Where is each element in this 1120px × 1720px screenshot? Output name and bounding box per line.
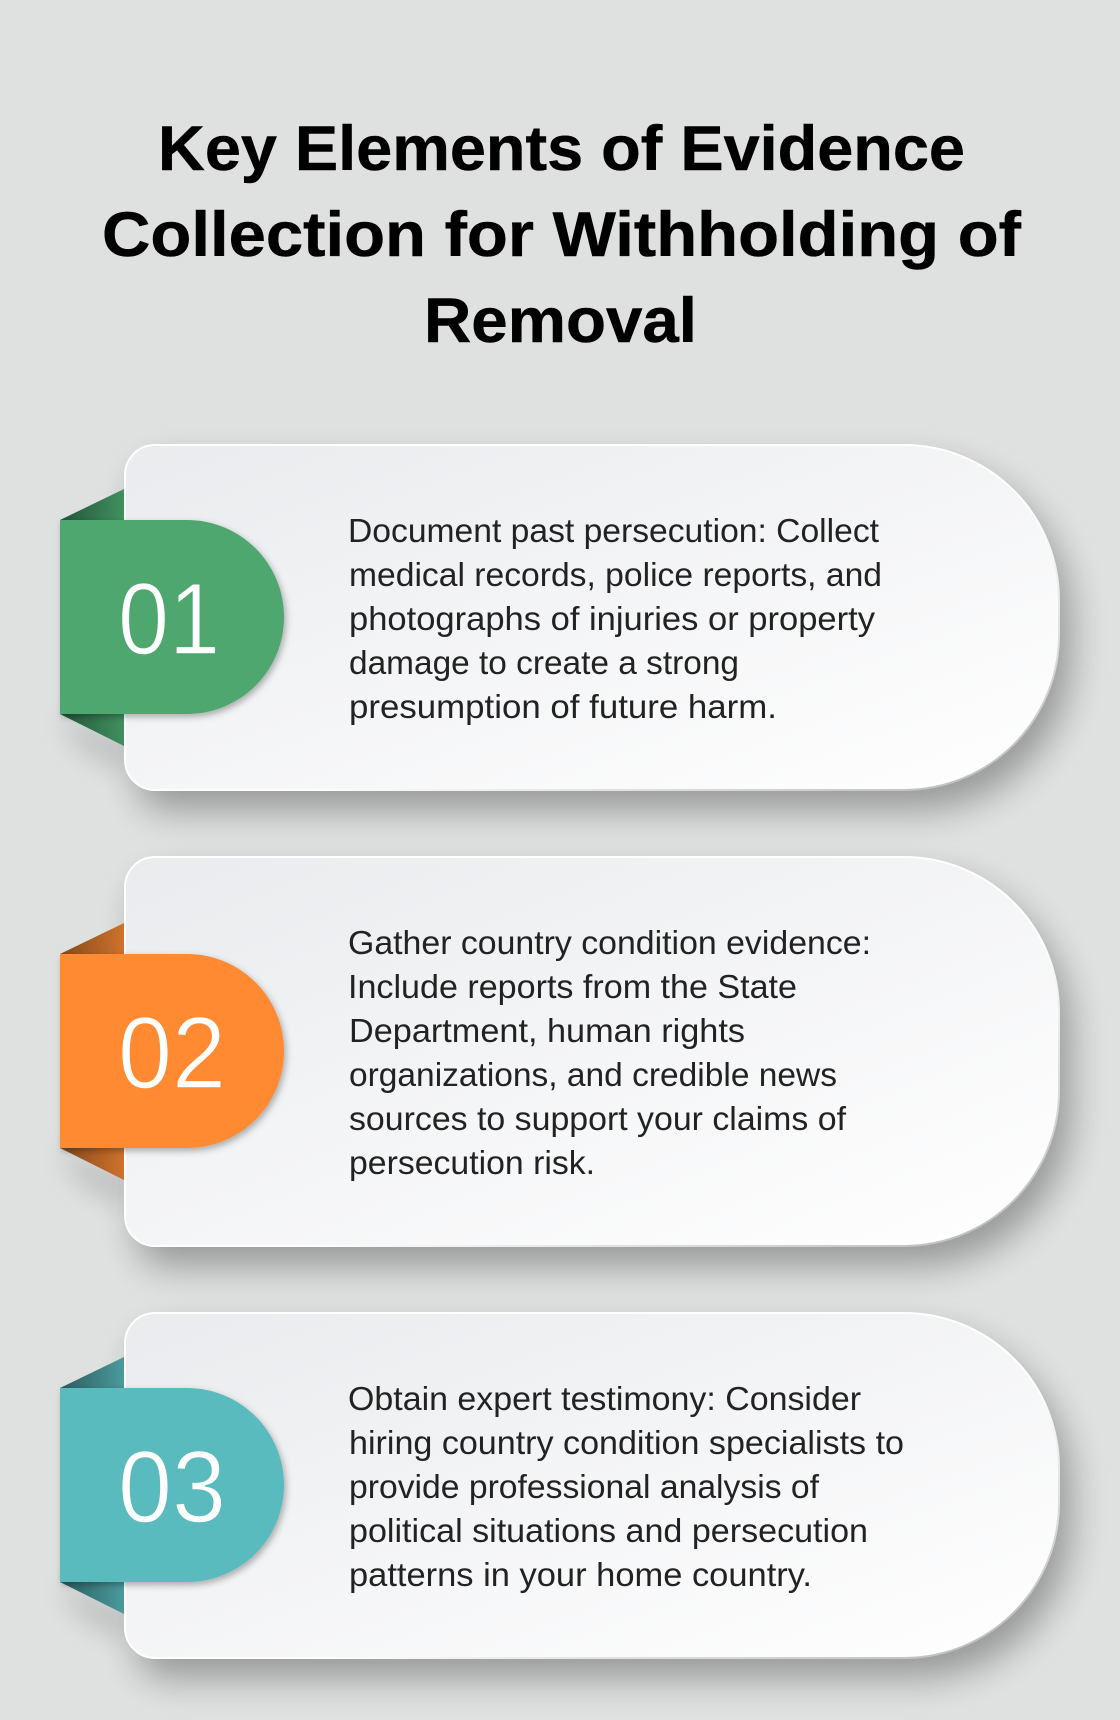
text: step 1 description: photographs of injuries or property bbox=[349, 600, 876, 637]
text: step 1 description: Document past persecution: Collect bbox=[348, 512, 879, 549]
text: step 3 description: political situations and persecution bbox=[349, 1512, 868, 1549]
panel: step 3 bbox=[60, 1313, 1071, 1678]
text: step 2 description: sources to support your claims of bbox=[349, 1100, 847, 1137]
text: step 2 description: Include reports from the State bbox=[348, 968, 797, 1005]
icon: ribbon fold bottom, step 1 bbox=[60, 714, 124, 770]
text: step 1 description: damage to create a strong bbox=[349, 644, 739, 681]
text: step 3 description: Obtain expert testimony: Consider bbox=[348, 1380, 861, 1417]
title: Key Elements of Evidence bbox=[158, 114, 965, 184]
text: step 3 description bbox=[348, 1380, 904, 1593]
number badge: 03: 03 bbox=[118, 1430, 226, 1544]
card: step 1 bbox=[125, 445, 1059, 790]
title: Removal bbox=[424, 286, 697, 356]
number badge: 02 bbox=[60, 954, 284, 1148]
text: step 2 description: persecution risk. bbox=[349, 1144, 595, 1181]
text: step 1 description: medical records, police reports, and bbox=[349, 556, 882, 593]
text: step 1 description: presumption of future harm. bbox=[349, 688, 777, 725]
icon: ribbon fold top, step 1 bbox=[60, 489, 124, 520]
text: step 3 description: hiring country condition specialists to bbox=[349, 1424, 904, 1461]
card: step 3 bbox=[125, 1313, 1059, 1658]
number badge: 03 bbox=[60, 1388, 284, 1582]
icon: ribbon fold bottom, step 3 bbox=[60, 1582, 124, 1638]
icon: ribbon fold bottom, step 2 bbox=[60, 1148, 124, 1204]
text: step 2 description: Gather country condition evidence: bbox=[348, 924, 871, 961]
text: step 3 description: provide professional analysis of bbox=[349, 1468, 820, 1505]
title bbox=[102, 114, 1022, 356]
icon: ribbon fold top, step 3 bbox=[60, 1357, 124, 1388]
text: step 3 description: patterns in your home country. bbox=[349, 1556, 812, 1593]
number badge: 01 bbox=[60, 520, 284, 714]
text: step 2 description: organizations, and credible news bbox=[349, 1056, 837, 1093]
title: Collection for Withholding of bbox=[102, 200, 1022, 270]
card: step 2 bbox=[125, 857, 1059, 1246]
panel: step 2 bbox=[60, 857, 1071, 1266]
panel: step 1 bbox=[60, 445, 1071, 810]
number badge: 02: 02 bbox=[118, 996, 226, 1110]
icon: ribbon fold top, step 2 bbox=[60, 923, 124, 954]
text: step 2 description: Department, human rights bbox=[349, 1012, 745, 1049]
text: step 2 description bbox=[348, 924, 871, 1181]
number badge: 01: 01 bbox=[118, 562, 220, 676]
text: step 1 description bbox=[348, 512, 882, 725]
